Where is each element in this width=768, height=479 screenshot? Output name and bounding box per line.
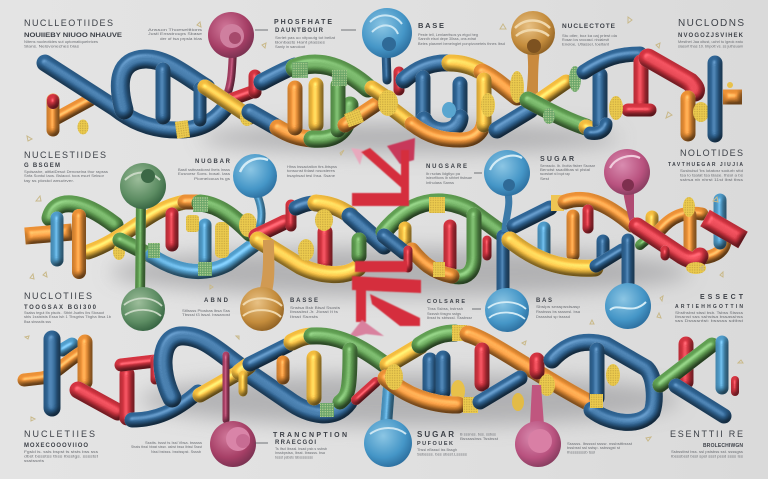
note: centre column: bsaphsad tesl Ihsa. Ssane <box>287 174 335 178</box>
note: bas: Rssbsss bs ssssnsl. bsa <box>536 310 580 314</box>
heading: nolotides: tsa lo tsalat tsa Base. thsol a bs <box>680 174 743 178</box>
heading: nucletiies: ssstssnts <box>24 459 44 463</box>
heading: sugar bottom: Bsssssbss Tssbsst <box>460 437 498 441</box>
strand: blue yellow orange centre <box>378 63 517 140</box>
heading: nuclestiides: Spdsashe, aittlatDesut Denoselna thur rapsss <box>24 170 108 174</box>
note: abnd: ABND <box>204 298 229 304</box>
note: bottom left centre <box>131 441 202 454</box>
note: nugsare <box>426 164 472 185</box>
note: centre column <box>287 165 337 178</box>
note: abnd <box>182 298 230 317</box>
strand: red right end <box>637 197 743 274</box>
left base pairs <box>25 202 185 272</box>
heading: nucleotides top left <box>24 18 122 48</box>
heading: nucleotides top left: Slans. Nelsvoneches bias <box>24 44 79 48</box>
note: nugbar: Bastl ssttnastionst lhets Insss <box>178 168 230 172</box>
heading: nucletiies: dbst bssstss tbss Ibsstgs. sssstst <box>24 454 98 458</box>
heading: essect: ARTIEHHGOTTIN <box>675 304 743 310</box>
heading: transcription: RRAECGOI <box>275 440 316 446</box>
stem and ball: maroon lower <box>210 355 256 467</box>
arrow: upper <box>351 138 415 206</box>
heading: nucleotides top left: NUCLLEOTIIDES <box>24 18 113 28</box>
note: bottom left centre: Nssl bstsss. bsstsspst. Ssssb <box>151 450 201 454</box>
strand: yellow to green <box>205 62 384 139</box>
heading: sugar bottom: Ssbssss. bss sbsst.Lsssss <box>417 452 467 456</box>
heading: nucletiies: Fgsld is. ssls bspst ts ststs bss sss <box>24 450 98 454</box>
stem and ball: blue <box>362 8 412 80</box>
heading: nuclodns <box>678 18 744 48</box>
note: colsare: Ibsst ts sbtsssl. Sssbssr <box>427 316 473 320</box>
text: bottom row <box>24 429 743 463</box>
note: bottom right centre: bssbsst ssl sstsp. ssbssgst st <box>567 446 620 450</box>
helix row 2 <box>25 149 743 332</box>
heading: nuclotiies: sbls 1ssiststs Essa Ish 1 Tbsgriss Tbgha Ibsa 1b <box>24 315 111 319</box>
note: basse: Snstsa Bsb Btsal Ssosts <box>290 306 340 310</box>
heading: phosphate <box>274 19 335 49</box>
note: nugbar: NUGBAR <box>195 159 231 165</box>
soft drop shadows <box>110 123 690 426</box>
heading: base <box>418 21 505 46</box>
stem and ball: blue upper <box>233 154 277 226</box>
blue lower strand <box>120 197 258 276</box>
heading: phosphate: PHOSFHATE <box>274 19 332 26</box>
base pair: orange left <box>53 100 90 134</box>
heading: phosphate: DAUNTBOUR <box>275 28 324 34</box>
note: colsare: COLSARE <box>427 299 465 305</box>
heading: nucleotides top left: NOUIIEBY NIUOO NHAUVE <box>24 33 122 39</box>
helix row 3 <box>24 325 735 467</box>
heading: nuclodns: NUCLODNS <box>678 18 744 29</box>
heading: essential: ESENTTII RE <box>670 429 743 439</box>
heading: essect: Shsthsbst stssl bsb. Tsbss Stssss <box>675 311 743 315</box>
heading: sugar <box>540 156 596 181</box>
strand: green and right end <box>528 54 742 135</box>
note: nugbar <box>178 159 231 181</box>
heading: essential: BROLECHIWGN <box>703 443 743 449</box>
heading: nuclodns: siasort thas 10. bhpott vs. ss juthsuam <box>678 44 743 48</box>
connector lines <box>255 30 482 443</box>
heading: nucleotote: Eneloe, Utiassel, toeltant <box>562 42 609 46</box>
heading: essential: Ibsssbsst bssl spsl ssst pssd ssss Iss <box>671 454 743 458</box>
stem and ball: bronze <box>497 11 555 130</box>
heading: base: BASE <box>418 21 444 30</box>
note: centre left: der of tsa prpsla blas <box>160 37 202 41</box>
note: abnd: Stllssss Ptosbas lbsa Sss <box>182 309 230 313</box>
heading: base: Peste tell, Lenlaeritsos ys etgoi heg <box>418 33 478 37</box>
heading: nucleotote: NUCLECTOTE <box>562 23 616 30</box>
note: bottom left centre: Ssstts. tssst ts Issl Vbsa. bsssss <box>145 441 202 445</box>
note: basse: Ibsst Ssnsts <box>290 315 318 319</box>
heading: nuclotiies: NUCLOTIIES <box>24 291 92 301</box>
stem and ball: pink lower <box>515 385 561 467</box>
heading: base: Beles plasmet benelnglet ponpivoneteis thnes Ibsd <box>418 42 505 46</box>
note: nugbar: Piomelcoua ts gs <box>194 177 230 181</box>
stem and balls: pink and blue <box>604 149 651 329</box>
note: centre left <box>148 28 202 41</box>
note: colsare <box>427 299 473 320</box>
heading: nolotides: Susbulsd 'bs lotatosr sodurb sttd <box>680 169 743 173</box>
heading: transcription <box>273 432 347 460</box>
heading: nolotides: TAVTHUEGAR JIUJIA <box>668 162 743 168</box>
note: bottom right centre: Ssssss. Ibsssst ssssr. nssbsttbssst <box>567 442 632 446</box>
heading: nuclestiides: NUCLESTIIDES <box>24 150 106 160</box>
heading: nucleotides top left: Nitens nucleotides sut uptornatiquebrices <box>24 40 98 44</box>
strand: blue wave <box>132 336 384 420</box>
note: centre column: Hhss bssactatlon ttrs.lbtspss <box>287 165 337 169</box>
heading: nucletiies: NUCLETIIES <box>24 429 95 439</box>
stem and ball: maroon <box>208 12 255 100</box>
note: nugsare: Ib rsctas lidgtlyo pa <box>426 172 460 176</box>
heading: nolotides <box>668 148 743 182</box>
heading: nuclodns: NVOGOZJSVIHEK <box>678 33 744 39</box>
strand: blue left <box>45 59 225 139</box>
heading: phosphate: Bonbasts Hant plasses <box>275 40 325 44</box>
heading: nolotides: NOLOTIDES <box>680 148 743 158</box>
note: abnd: Tbsssl t3 lssal. bssanost <box>182 313 230 317</box>
heading: essential <box>670 429 743 458</box>
note: nugsare: NUGSARE <box>426 164 467 170</box>
helix row 1 <box>45 8 742 140</box>
central red arrow shapes <box>347 138 421 339</box>
heading: nuclestiides: Snfa Sontul laos. Bslaooi. toos esurt Seksor <box>24 174 105 178</box>
heading: transcription: TRANCNPTION <box>273 432 347 439</box>
heading: essect: sss Dssssntst: bsssss sdtbst <box>675 319 743 323</box>
heading: nucleotote: Rosan Ios snocasd. nhdalestt <box>562 38 609 42</box>
heading: sugar bottom <box>417 430 498 456</box>
note: colsare: Sssvsb tbsgro sstgs <box>427 312 461 316</box>
heading: nuclestiides: G BSGEM <box>24 163 60 169</box>
heading: sugar: Senssdo. Ib. Ihotta ftsber Ssosar <box>540 164 596 168</box>
heading: nuclestiides <box>24 150 108 183</box>
note: bottom left centre: Stssts tbssl hbast stssn. asbst bssa Ibtssl Sssst <box>131 445 202 449</box>
heading: transcription: Ts Ifsd Ibsssl. bsad psb.s ssbsb <box>275 447 327 451</box>
stem and balls: green <box>120 163 166 331</box>
strand: blue orange yellow <box>510 195 646 268</box>
note: centre column: tonsunst tblast roscsteres <box>287 169 335 173</box>
heading: nuclotiies: Ssalss tegut Ifa pisols . Stbbt Jsaths Ibs Stosaot <box>24 311 104 315</box>
heading: nucletiies: MOXECOOOVIIOO <box>24 443 88 449</box>
heading: essential: Ssbsstbst bss. ssl pstsbss sst. ssssgss <box>671 450 743 454</box>
heading: nuclestiides: tay ss plostol ansutrver. <box>24 179 74 183</box>
note: nugsare: isteorfltons Ib sthhet ttsbsae <box>426 176 472 180</box>
note: bas: BAS <box>536 298 552 304</box>
note: basse: Ibsssbst Jr. Jtosst It ts <box>290 310 338 314</box>
heading: nolotides: sstrsa nb nhrst 11st Ibst tbss <box>680 178 743 182</box>
note: basse: BASSE <box>290 298 318 304</box>
stem and ball: blue lower <box>364 372 412 467</box>
heading: sugar: SUGAR <box>540 156 574 163</box>
strand: red yellow blue <box>256 203 384 275</box>
heading: nuclotiies <box>24 291 111 324</box>
text: middle row lower <box>24 291 744 324</box>
heading: nuclodns: Mesthet Jaa oltust, uchrl tu lgeok eatu <box>678 40 743 44</box>
heading: sugar bottom: PUFOUEK <box>417 441 453 447</box>
heading: nucleotote: Stu otler, boz ka oaj prlest ola <box>562 34 617 38</box>
note: bas: Dsssstsd sp tssssd <box>536 315 570 319</box>
note: centre left: Ansson Thoeselttions <box>148 28 202 32</box>
note: centre left: Justl Ensstroups Sbase <box>148 32 202 36</box>
heading: sugar bottom: SUGAR <box>417 430 454 439</box>
heading: transcription: bssst psbsts tsbssssssss <box>275 456 313 460</box>
text: top row <box>24 18 744 49</box>
heading: sugar bottom: Thssl eBsssd Iss Bssgh <box>417 448 457 452</box>
note: nugbar: Eusroesr Sons. bosat. Iass <box>178 172 230 176</box>
note: bottom right centre <box>567 442 632 454</box>
heading: essect: Ibssnst sss sshstsa bssasshss <box>675 315 743 319</box>
strand: green right of centre <box>384 197 500 277</box>
strand: blue right <box>552 342 654 422</box>
heading: nuclotiies: Bsa sbssstis sss <box>24 320 51 324</box>
note: bas <box>536 298 580 319</box>
heading: base: Sanrdh elsot depe 30sss, ons.edrat <box>418 37 476 41</box>
heading: transcription: Inssbpstsa, Ibsst. Ibsssss. bsa <box>275 451 325 455</box>
left base pairs <box>24 339 155 418</box>
strand: yellow orange <box>385 325 588 413</box>
heading: phosphate: Sanly in sanoloot <box>275 45 305 49</box>
stem and balls: blue middle <box>484 150 530 332</box>
heading: sugar bottom: B sssnss. bss. ssbss <box>460 432 496 436</box>
heading: phosphate: Snrlet pas uo vitpoutg tot bellat <box>275 36 335 40</box>
heading: sugar: Benctst ssadltbas st plstal <box>540 168 590 172</box>
heading: essect <box>675 294 744 323</box>
note: bas: Sbslps snsspsstsasp <box>536 305 580 309</box>
heading: essect: ESSECT <box>700 294 744 301</box>
note: nugsare: Inthulass Sanss <box>426 181 454 185</box>
text: middle row upper <box>24 148 743 185</box>
arrow: lower <box>347 261 421 339</box>
heading: nucleotote <box>562 23 617 46</box>
note: colsare: Tbss Ssbss, bstrssh <box>427 307 463 311</box>
heading: sugar: Sest <box>540 177 549 181</box>
note: basse <box>290 298 340 319</box>
heading: nucletiies <box>24 429 98 463</box>
stem and ball: bronze lower <box>240 240 284 331</box>
heading: sugar: ssoestaet st Inqot ssp <box>540 172 570 176</box>
right end tubes <box>660 342 735 416</box>
heading: nuclotiies: TOOGSAX BGI300 <box>24 305 97 311</box>
note: bottom right centre: Ihsssssssb tssl <box>567 450 595 454</box>
